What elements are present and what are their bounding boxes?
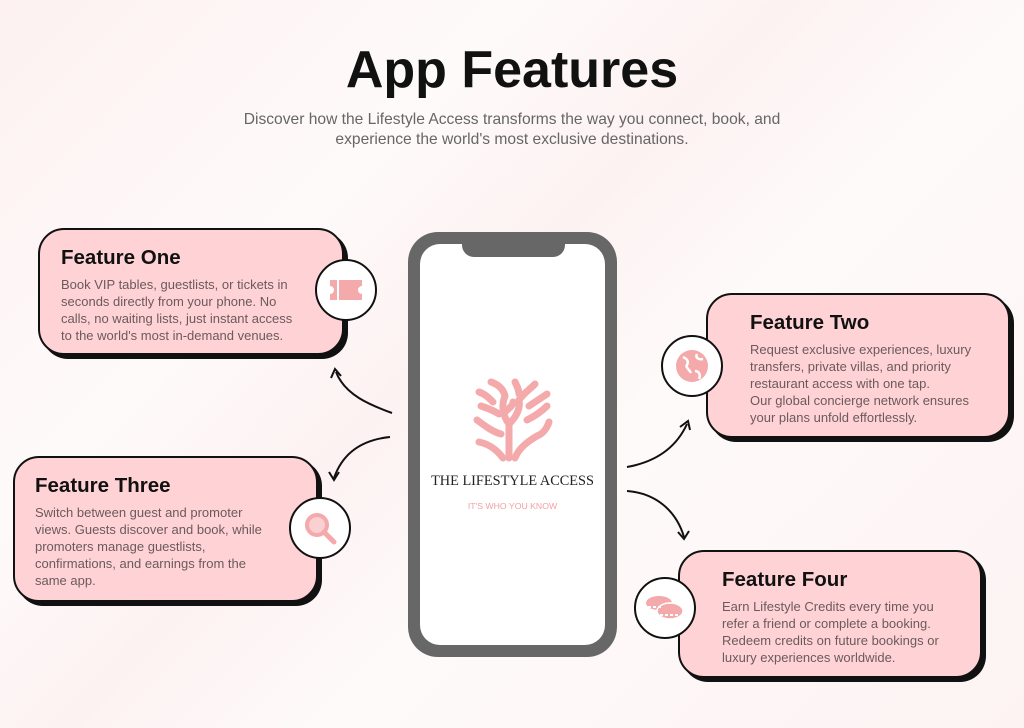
card: feature two: Request exclusive experiences, luxury — [750, 342, 971, 357]
card: feature four: Feature Four — [722, 568, 847, 591]
card: feature three: views. Guests discover and book, while — [35, 522, 262, 537]
subtitle: Discover how the Lifestyle Access transforms the way you connect, book, and — [244, 111, 780, 128]
card: feature two: your plans unfold effortlessly. — [750, 410, 917, 425]
card: feature two: transfers, private villas, and priority — [750, 359, 951, 374]
card: feature three: promoters manage guestlists, — [35, 539, 206, 554]
card: feature three: Feature Three — [35, 474, 171, 497]
card: feature three: same app. — [35, 573, 96, 588]
card: feature one: to the world's most in-demand venues. — [61, 328, 283, 343]
card: feature two: restaurant access with one tap. — [750, 376, 930, 391]
card: feature four: luxury experiences worldwide. — [722, 650, 895, 665]
card: feature one: Book VIP tables, guestlists, or tickets in — [61, 277, 288, 292]
card: feature three: Switch between guest and promoter — [35, 505, 242, 520]
icon: coins — [634, 577, 696, 639]
icon: search — [289, 497, 351, 559]
card: feature one — [38, 228, 344, 355]
card: feature four: refer a friend or complete a booking. — [722, 616, 931, 631]
card: feature three — [13, 456, 318, 602]
phone — [408, 232, 617, 657]
card: feature one: calls, no waiting lists, just instant access — [61, 311, 292, 326]
card: feature one: seconds directly from your phone. No — [61, 294, 276, 309]
notch — [462, 243, 565, 257]
card: feature two: Our global concierge network ensures — [750, 393, 969, 408]
tagline: IT'S WHO YOU KNOW — [468, 501, 557, 511]
subtitle: experience the world's most exclusive destinations. — [335, 131, 689, 148]
icon: globe — [661, 335, 723, 397]
card: feature four: Redeem credits on future bookings or — [722, 633, 939, 648]
logo — [474, 378, 552, 462]
subtitle — [244, 111, 780, 148]
card: feature two: Feature Two — [750, 311, 869, 334]
phone screen — [420, 244, 605, 645]
card: feature three: confirmations, and earnings from the — [35, 556, 246, 571]
brand name: THE LIFESTYLE ACCESS — [431, 473, 594, 489]
title: App Features — [346, 41, 678, 99]
card: feature one: Feature One — [61, 246, 181, 269]
card: feature two — [706, 293, 1010, 438]
icon: ticket — [315, 259, 377, 321]
card: feature four: Earn Lifestyle Credits every time you — [722, 599, 934, 614]
card: feature four — [678, 550, 982, 678]
